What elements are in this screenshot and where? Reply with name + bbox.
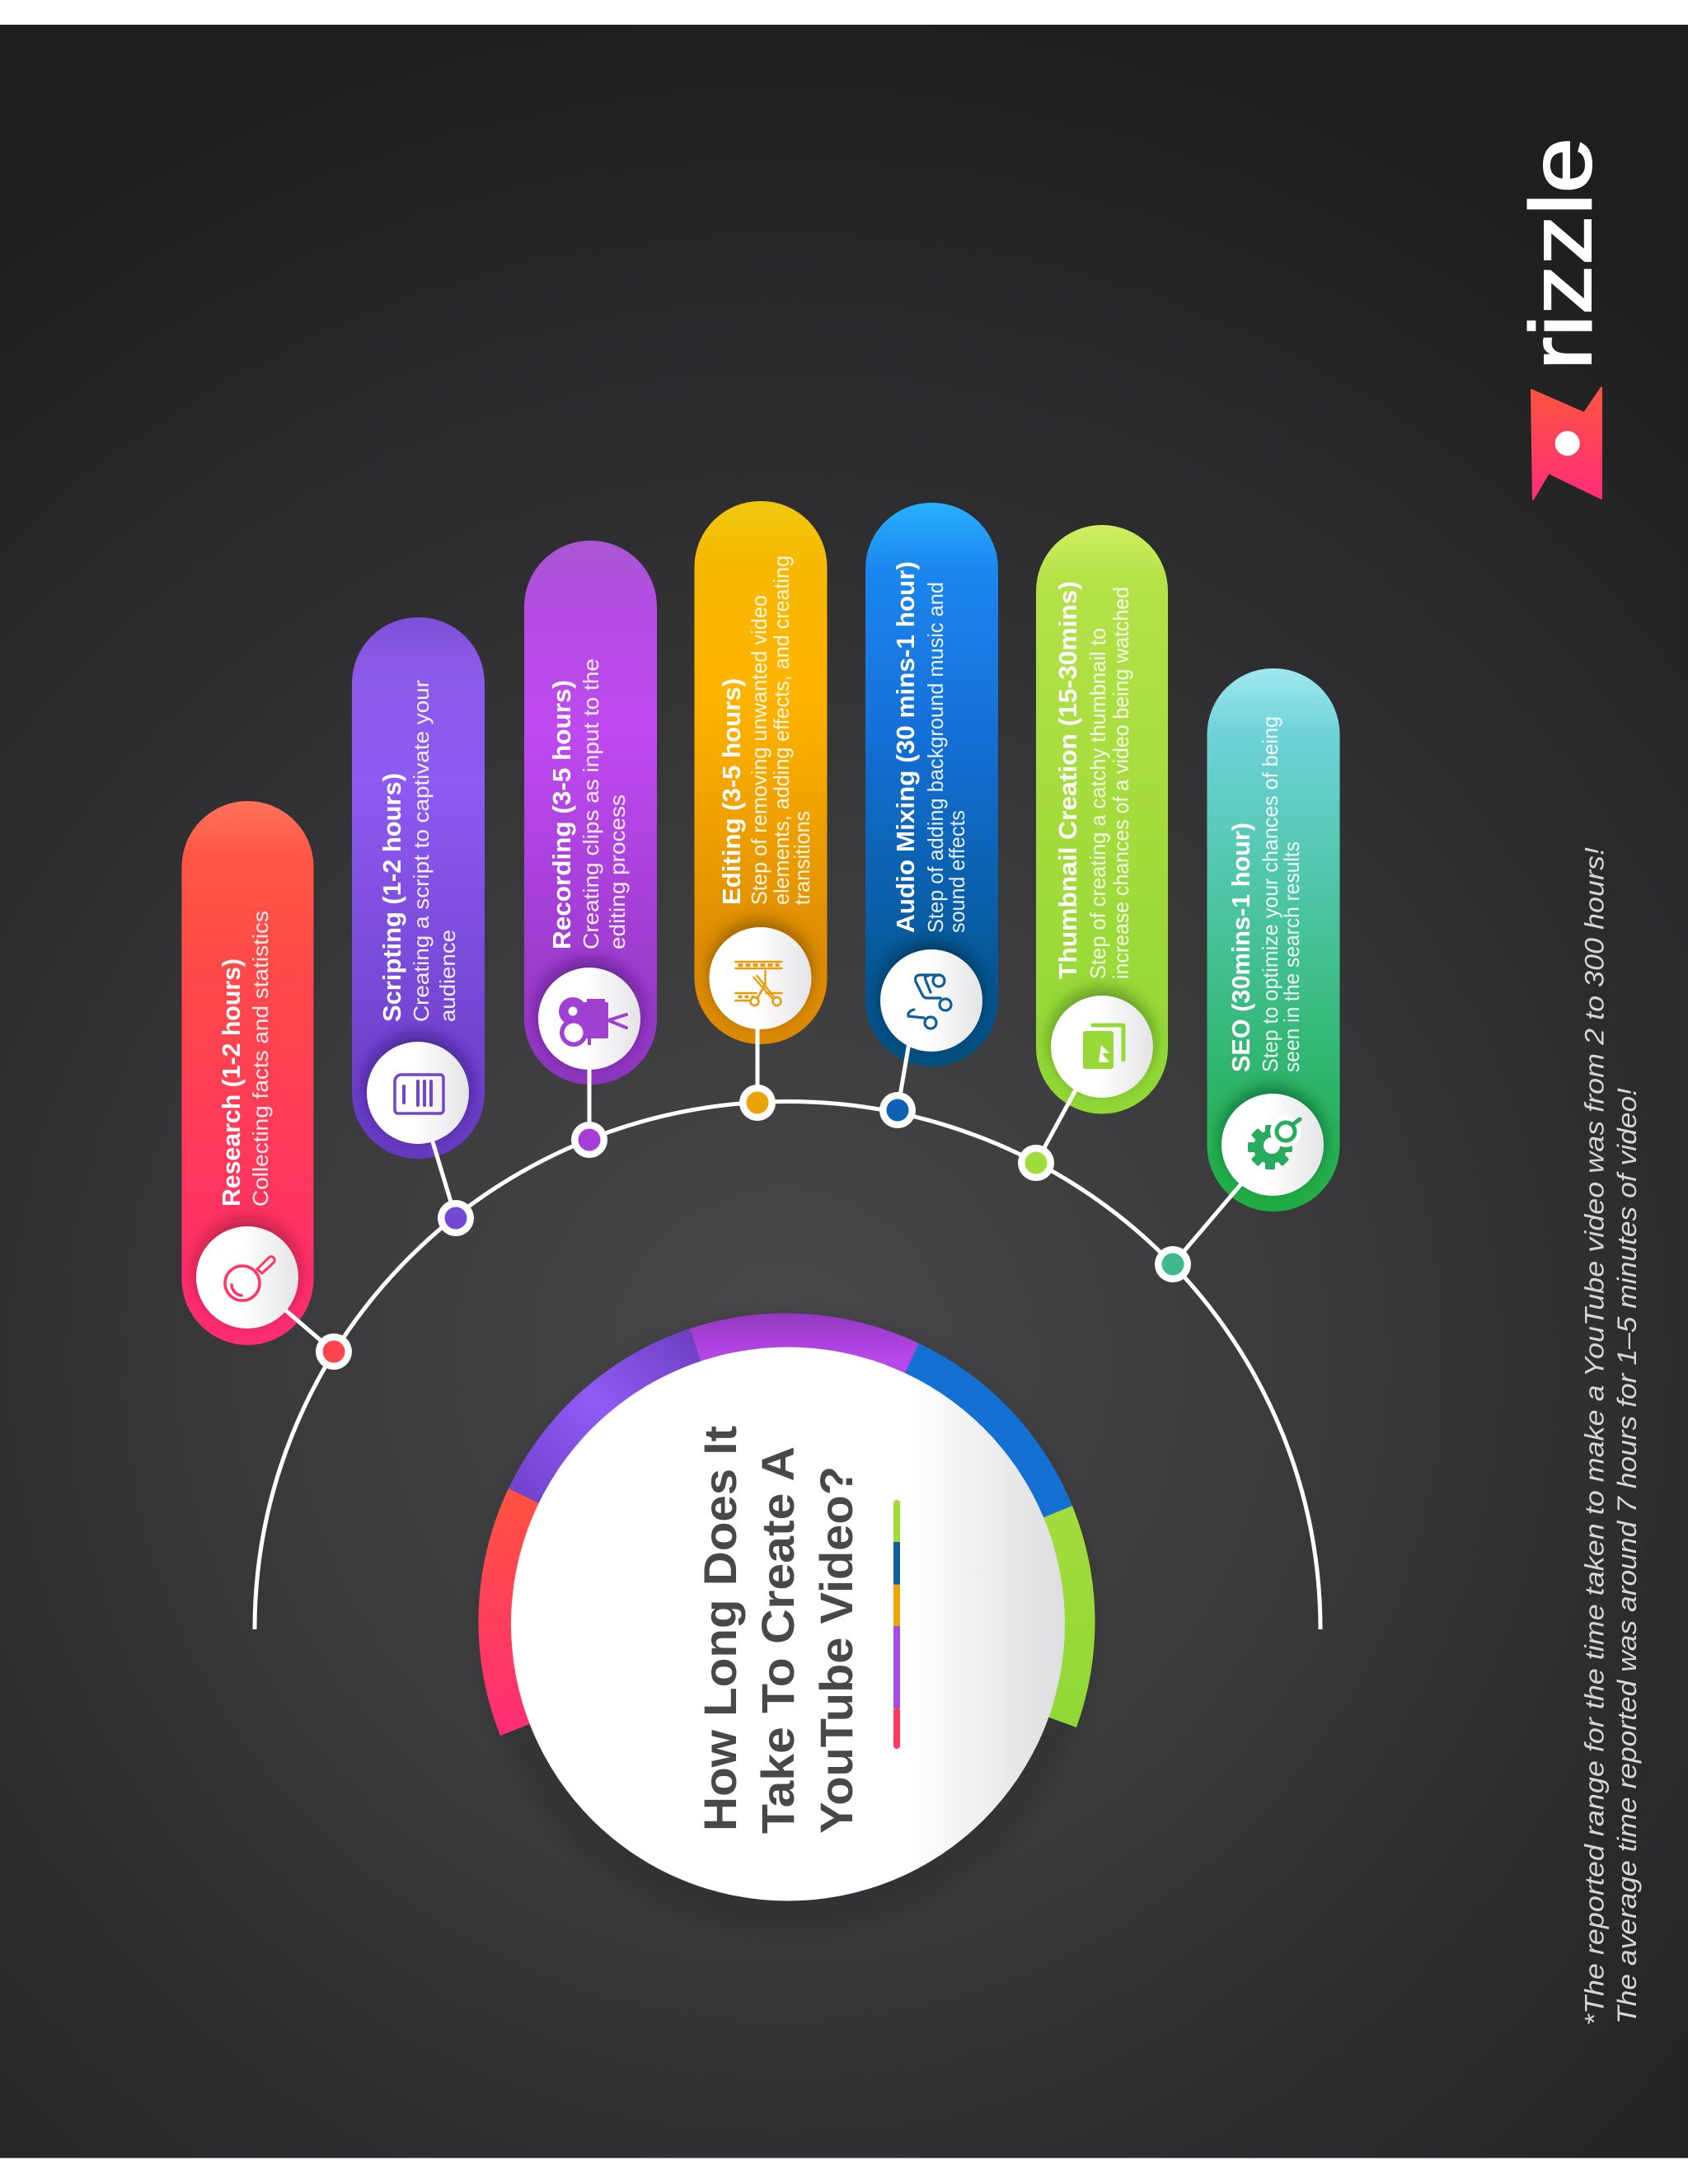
icon: image stack	[1083, 1025, 1123, 1069]
panel: research	[181, 801, 334, 1352]
title: Take To Create A	[752, 1446, 804, 1834]
title: YouTube Video?	[810, 1466, 862, 1834]
icon: audio waveform	[908, 975, 951, 1029]
text: seo heading: SEO (30mins-1 hour)	[1226, 823, 1255, 1072]
ring segment: recording	[690, 1313, 919, 1622]
ring segment: scripting	[509, 1329, 787, 1622]
text: research description: Collecting facts and statistics	[248, 911, 273, 1207]
centre disc	[511, 1347, 1065, 1900]
text: seo description: Step to optimize your chances of being	[1258, 716, 1282, 1072]
text: editing heading: Editing (3-5 hours)	[717, 678, 746, 905]
connector: audio mixing	[898, 1014, 914, 1110]
text: seo description: seen in the search results	[1279, 841, 1304, 1072]
icon: video camera	[559, 997, 626, 1047]
panel: thumbnail creation	[1036, 525, 1168, 1163]
icon: script	[395, 1075, 443, 1113]
text: scripting heading: Scripting (1-2 hours)	[377, 773, 406, 1022]
panel: recording	[524, 541, 657, 1140]
connector: recording	[587, 1019, 592, 1140]
timeline nodes	[316, 1085, 1191, 1370]
text: scripting description: Creating a script to captivate your	[409, 680, 434, 1022]
text: scripting description: audience	[435, 930, 460, 1022]
text: thumbnail creation description: increase chances of a video being watched	[1109, 587, 1133, 979]
ring segment: audio	[787, 1343, 1072, 1622]
connector: research	[247, 1277, 334, 1352]
panel: audio mixing	[865, 503, 998, 1110]
text: recording description: Creating clips as input to the	[579, 658, 603, 949]
text: editing description: elements, adding effects, and creating	[769, 555, 794, 905]
title: How Long Does It	[694, 1426, 746, 1831]
footnote: *The reported range for the time taken to make a YouTube video was from 2 to 300 hours!	[1579, 847, 1609, 2026]
footnote: The average time reported was around 7 hours for 1–5 minutes of video!	[1612, 1088, 1642, 2024]
text: editing description	[747, 555, 814, 905]
logo mark	[1531, 387, 1601, 499]
icon: gear and magnifier	[1248, 1116, 1301, 1169]
logo	[1512, 138, 1610, 499]
icon: film and scissors	[735, 962, 781, 1005]
panel: scripting	[352, 617, 485, 1218]
text: thumbnail creation description	[1085, 587, 1133, 979]
text: audio mixing description: Step of adding background music and	[923, 582, 948, 933]
connector: editing	[755, 978, 760, 1103]
ring segment: thumbnail	[787, 1506, 1095, 1727]
panel: editing	[694, 501, 828, 1103]
connector: thumbnail creation	[1036, 1067, 1088, 1163]
text: recording heading: Recording (3-5 hours)	[547, 680, 576, 949]
timeline arc	[255, 1102, 1320, 1629]
connector: scripting	[418, 1093, 456, 1218]
text: seo description	[1258, 716, 1304, 1072]
text: editing description: transitions	[790, 811, 814, 905]
text: audio mixing heading: Audio Mixing (30 mins-1 hour)	[891, 561, 920, 933]
icon: magnifier	[225, 1257, 274, 1301]
text: thumbnail creation description: Step of creating a catchy thumbnail to	[1085, 628, 1110, 979]
panel: seo	[1173, 668, 1340, 1264]
text: recording description: editing process	[605, 794, 630, 949]
ring segment: research	[478, 1488, 787, 1736]
text: audio mixing description	[923, 582, 969, 933]
text: scripting description	[409, 680, 460, 1022]
text: audio mixing description: sound effects	[945, 810, 969, 933]
text: recording description	[579, 658, 630, 949]
title	[694, 1426, 862, 1834]
connector: seo	[1173, 1170, 1253, 1264]
central hub with coloured ring	[478, 1313, 1095, 1930]
footnote	[1579, 847, 1642, 2026]
text: editing description: Step of removing unwanted video	[747, 595, 771, 905]
text: thumbnail creation heading: Thumbnail Creation (15-30mins)	[1053, 581, 1082, 979]
multicolour title rule	[893, 1500, 900, 1749]
logo wordmark: rizzle	[1512, 138, 1610, 370]
text: research heading: Research (1-2 hours)	[217, 958, 246, 1207]
